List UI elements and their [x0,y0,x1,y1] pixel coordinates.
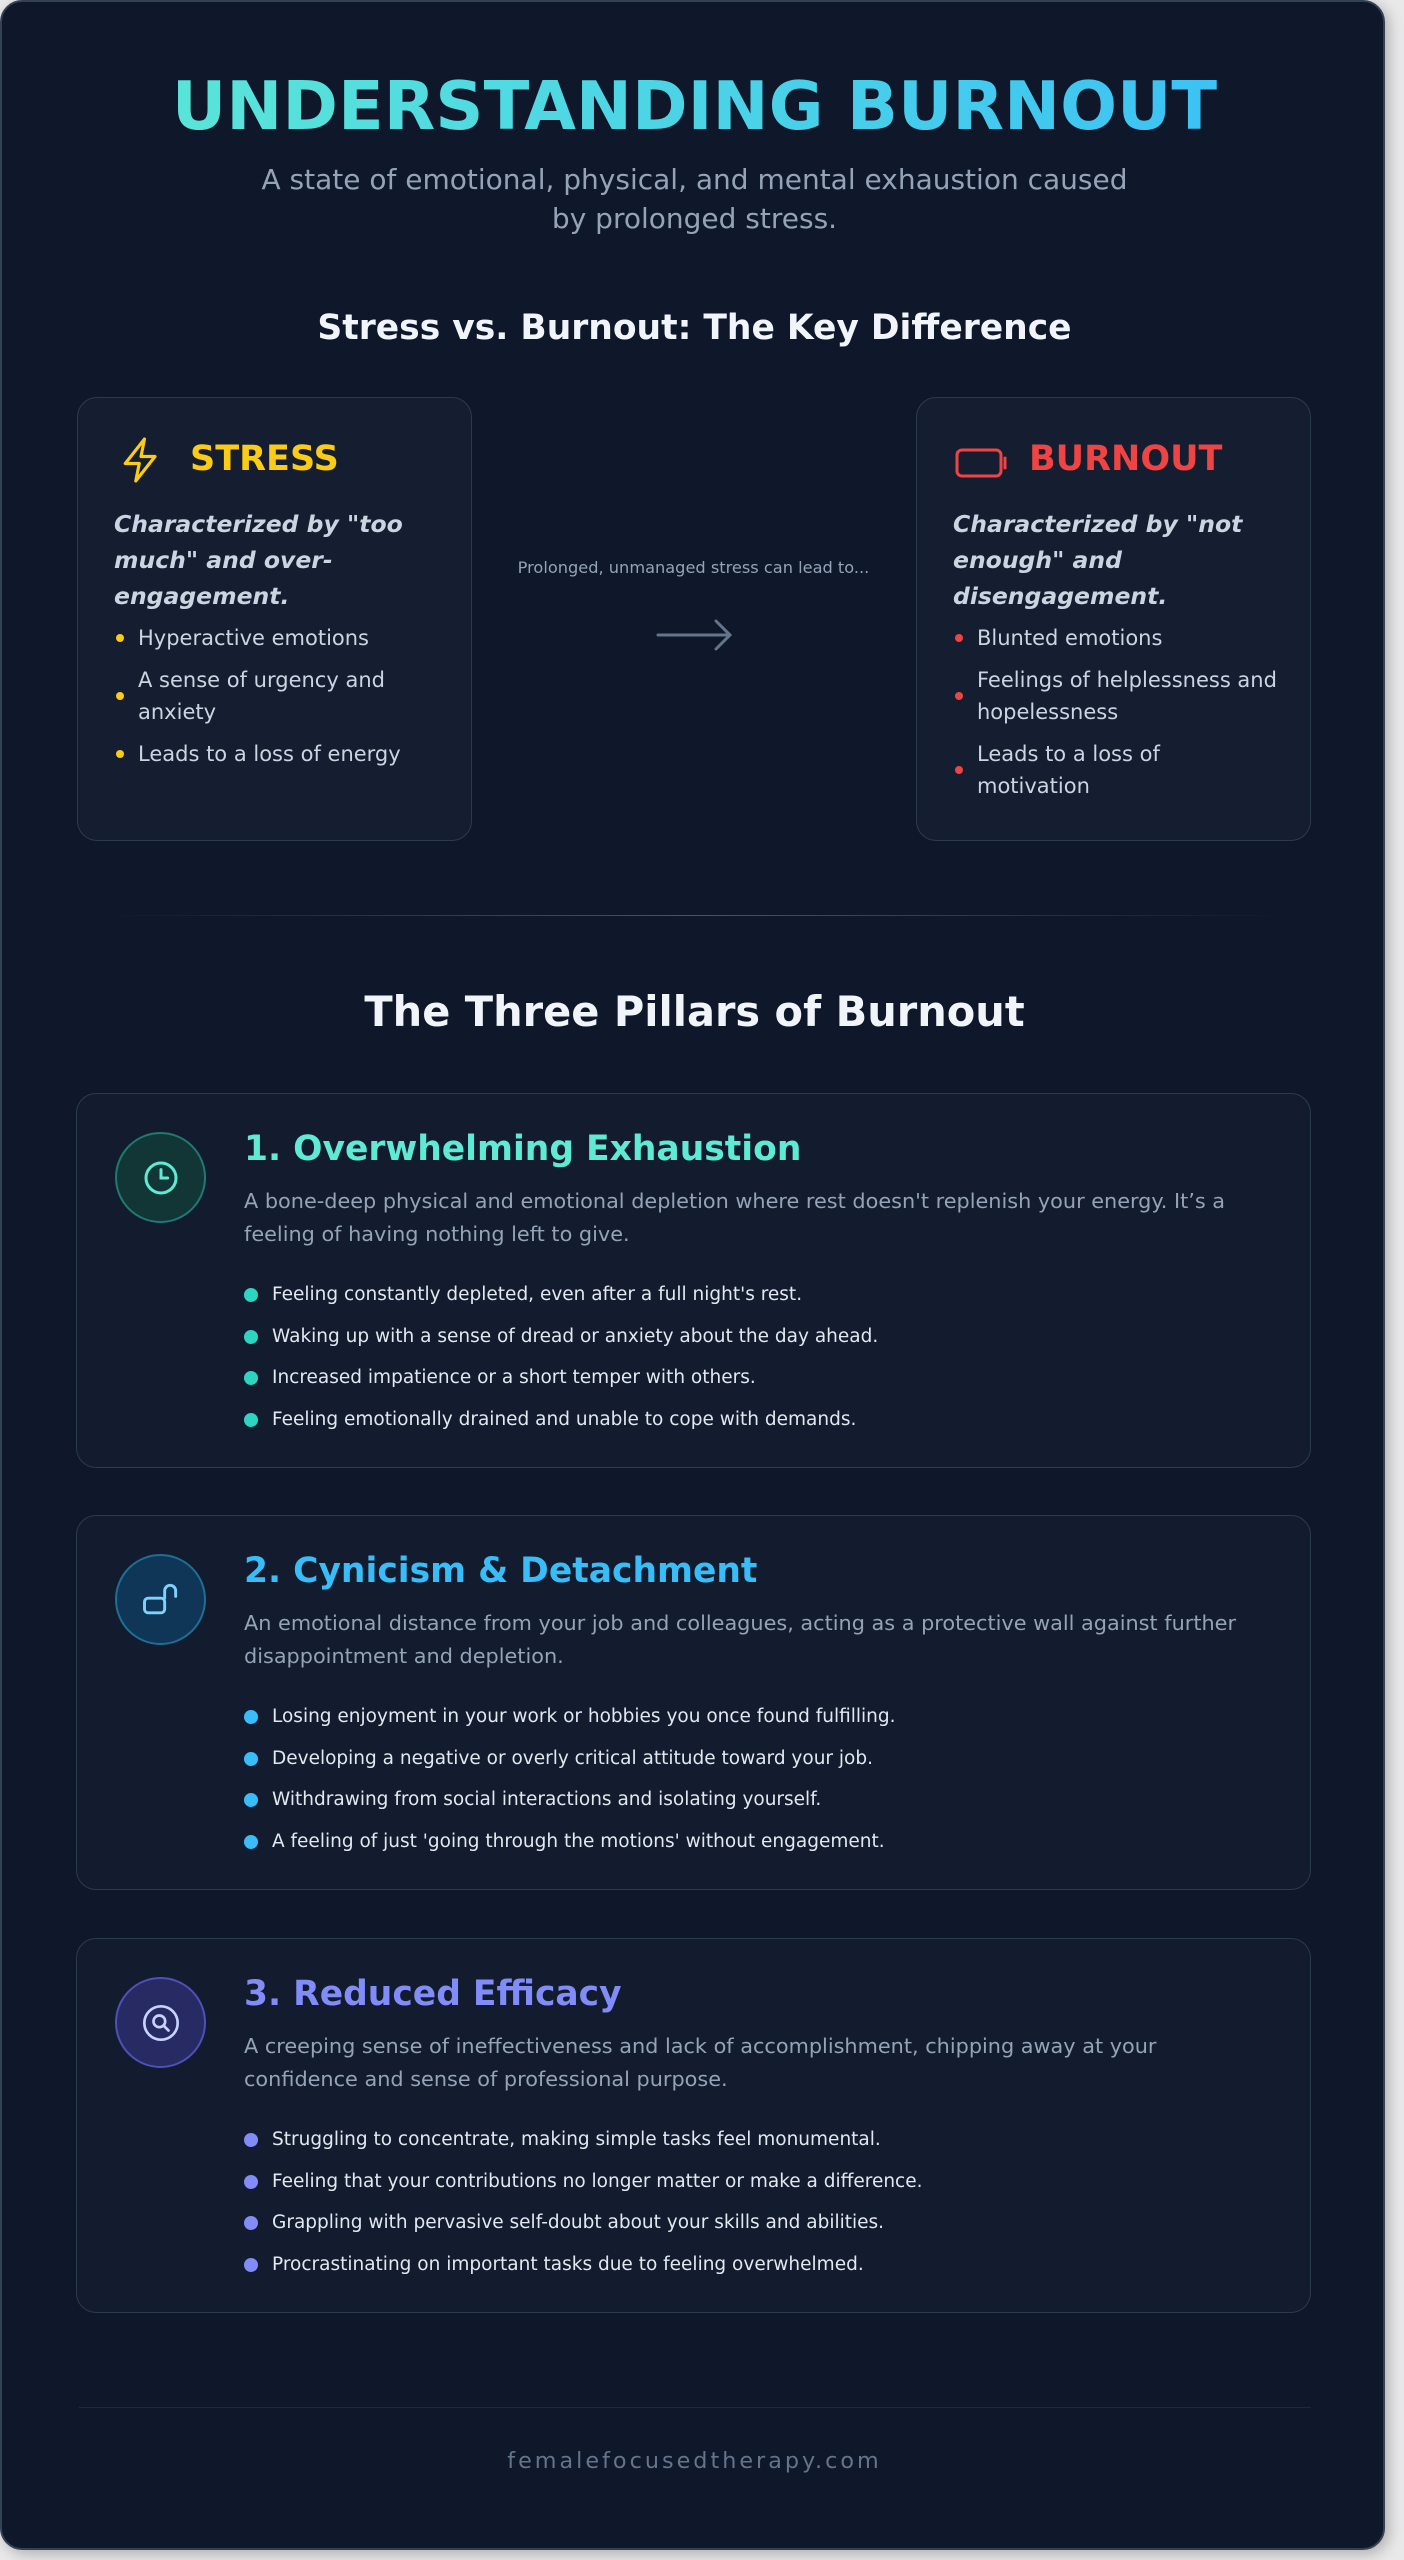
panel: pillar 3 [76,1938,1311,2313]
stress title: STRESS [190,439,339,479]
pillar 3 bullets [244,2129,922,2274]
stress bullets: Leads to a loss of energy [138,742,401,766]
burnout bullets: hopelessness [977,700,1118,724]
transition text: Prolonged, unmanaged stress can lead to... [518,558,869,577]
pillar 2 heading: 2. Cynicism & Detachment [244,1551,757,1591]
pillar 1 bullets: Feeling constantly depleted, even after a full night's rest. [272,1284,802,1305]
pillar 1 bullets: Waking up with a sense of dread or anxiety about the day ahead. [272,1326,878,1346]
pillar 3 bullets: Feeling that your contributions no longer matter or make a difference. [272,2170,922,2192]
subtitle [262,163,1127,235]
pillar 2 bullets: A feeling of just 'going through the motions' without engagement. [272,1830,885,1852]
pillar 3 bullets: Procrastinating on important tasks due to feeling overwhelmed. [272,2254,864,2274]
pillar 1 bullets: Increased impatience or a short temper with others. [272,1367,756,1388]
pillar 2 bullets: Losing enjoyment in your work or hobbies you once found fulfilling. [272,1706,896,1727]
pillar 1 heading: 1. Overwhelming Exhaustion [244,1129,801,1169]
icon: unlocked padlock [115,1554,206,1645]
burnout bullets: Leads to a loss of [977,742,1160,766]
pillar 1 description: A bone-deep physical and emotional depletion where rest doesn't replenish your energy. It’s a feeling of having nothing left to give. [244,1189,1225,1246]
subtitle: A state of emotional, physical, and mental exhaustion caused [262,163,1127,196]
burnout bullets: Blunted emotions [977,626,1162,650]
heading: three pillars: The Three Pillars of Burnout [364,987,1025,1036]
stress bullets: A sense of urgency and anxiety [138,668,385,724]
pillar 3 bullets: Grappling with pervasive self-doubt about your skills and abilities. [272,2212,884,2233]
panel: pillar 1 [76,1093,1311,1468]
icon: clock [115,1132,206,1223]
title: UNDERSTANDING BURNOUT [172,67,1217,145]
pillar 2 description: An emotional distance from your job and colleagues, acting as a protective wall against further disappointment and depletion. [244,1611,1236,1668]
icon: magnifier [115,1977,206,2068]
footer: femalefocusedtherapy.com [507,2448,882,2474]
pillar 3 bullets: Struggling to concentrate, making simple tasks feel monumental. [272,2129,881,2150]
pillar 1 bullets: Feeling emotionally drained and unable to cope with demands. [272,1408,856,1430]
heading: stress vs burnout: Stress vs. Burnout: The Key Difference [317,308,1072,348]
burnout bullets: Feelings of helplessness and [977,668,1277,692]
burnout title: BURNOUT [1029,439,1222,479]
pillar 2 bullets: Developing a negative or overly critical attitude toward your job. [272,1748,873,1768]
subtitle: by prolonged stress. [552,202,837,235]
pillar 3 heading: 3. Reduced Efficacy [244,1974,622,2014]
pillar 2 bullets [244,1706,896,1852]
panel: burnout [916,397,1311,841]
icon: lightning [124,437,157,483]
burnout description: Characterized by "not enough" and disengagement. [953,510,1242,610]
pillar 3 description: A creeping sense of ineffectiveness and lack of accomplishment, chipping away at your confidence and sense of professional purpose. [244,2034,1156,2091]
burnout bullets [955,626,1277,798]
stress bullets [116,626,401,766]
icon: battery [956,448,1006,478]
stress bullets: Hyperactive emotions [138,626,369,650]
panel: stress [77,397,472,841]
pillar 2 bullets: Withdrawing from social interactions and isolating yourself. [272,1789,821,1810]
burnout bullets: motivation [977,774,1090,798]
panel: pillar 2 [76,1515,1311,1890]
stress description: Characterized by "too much" and over-engagement. [114,510,403,610]
pillar 1 bullets [244,1284,878,1430]
arrow [656,619,732,650]
